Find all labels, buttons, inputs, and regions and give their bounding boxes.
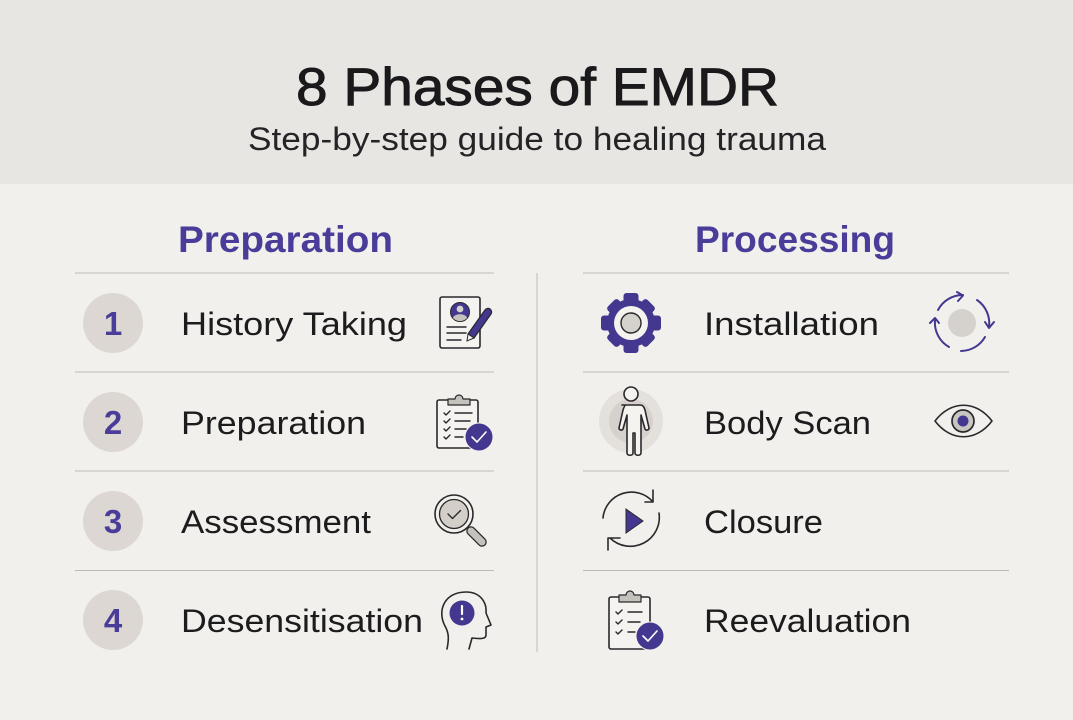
phase 1 number badge: [83, 293, 143, 353]
icon: clipboard with check badge: [609, 591, 664, 650]
phase 2 number badge: 2: [104, 404, 122, 441]
icon: eye: [935, 405, 992, 437]
icon: clipboard with check badge: [437, 395, 493, 451]
heading: Preparation: Preparation: [178, 219, 393, 260]
icon: gear: [601, 293, 661, 353]
heading: Processing: Processing: [695, 219, 895, 260]
icon: magnifier with check: [435, 495, 482, 542]
icon: cycle with play: [603, 490, 659, 550]
phase 8 label: Reevaluation: [704, 603, 911, 639]
header band: [0, 0, 1073, 184]
icon: head with alert: [442, 592, 491, 649]
phase 4 label: Desensitisation: [181, 603, 423, 639]
phase 5 label: Installation: [704, 306, 879, 342]
panel: processing phases: [599, 292, 994, 650]
phase 1 label: History Taking: [181, 306, 407, 342]
phase 3 label: Assessment: [181, 504, 371, 540]
icon: body scan figure: [599, 387, 663, 455]
phase 3 number badge: [83, 491, 143, 551]
phase 1 number badge: 1: [104, 305, 122, 342]
phase 4 number badge: 4: [104, 602, 123, 639]
subtitle: Step-by-step guide to healing trauma: [248, 121, 826, 157]
panel: preparation phases: [83, 293, 493, 650]
phase 2 number badge: [83, 392, 143, 452]
phase 7 label: Closure: [704, 504, 823, 540]
icon: document with pen: [440, 297, 492, 348]
phase 6 label: Body Scan: [704, 405, 871, 441]
phase 2 label: Preparation: [181, 405, 366, 441]
phase 3 number badge: 3: [104, 503, 122, 540]
icon: rotating arrows around circle: [930, 292, 994, 351]
phase 4 number badge: [83, 590, 143, 650]
title: 8 Phases of EMDR: [296, 58, 779, 117]
